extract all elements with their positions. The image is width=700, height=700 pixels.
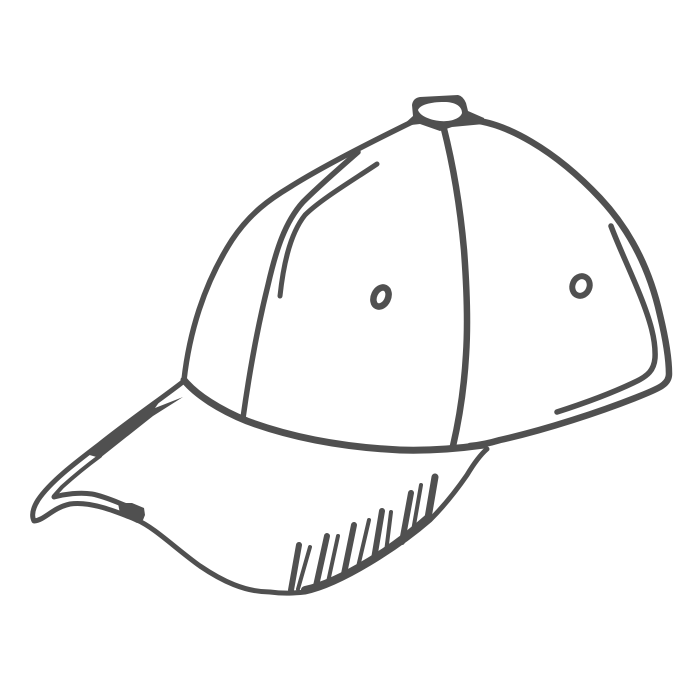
left inner stitching — [280, 164, 377, 296]
right inner stitching — [557, 226, 655, 412]
left eyelet — [370, 285, 392, 309]
brim end blob — [118, 503, 145, 523]
brim lower edge thickening — [305, 518, 428, 590]
right eyelet — [569, 274, 593, 298]
left seam — [243, 152, 358, 418]
brim outer edge — [33, 381, 487, 593]
crown outline: right side — [470, 120, 669, 446]
brim edge thick stroke — [86, 394, 183, 458]
center seam — [443, 125, 467, 446]
brim hatching — [291, 477, 435, 590]
sweatband seam — [184, 380, 484, 450]
crown outline: left side — [184, 120, 416, 380]
brim inner stitching — [54, 456, 100, 496]
top button — [402, 95, 484, 131]
